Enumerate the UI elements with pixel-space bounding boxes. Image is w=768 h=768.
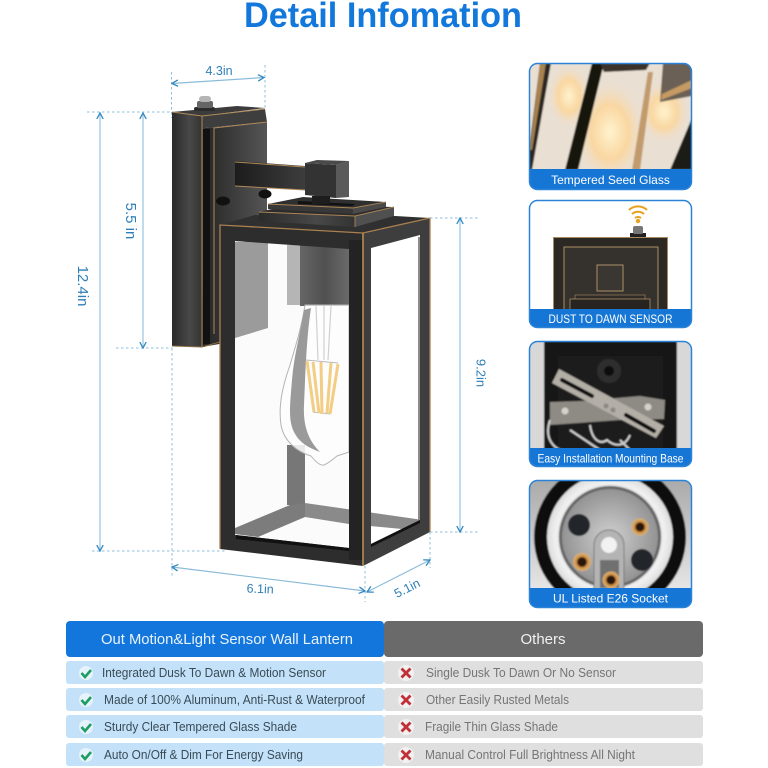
wall lantern product illustration (172, 96, 430, 566)
right column header: Others (520, 631, 566, 648)
caption band: Easy Installation Mounting Base (538, 452, 684, 466)
comparison table (66, 621, 703, 766)
icon: wifi signal (629, 206, 647, 222)
row 3 left: Sturdy Clear Tempered Glass Shade (104, 719, 297, 734)
row 3 right: Fragile Thin Glass Shade (425, 719, 558, 734)
depth arrow 6.1in (172, 567, 365, 596)
panel: dusk to dawn sensor (529, 200, 692, 328)
row 1 left: Integrated Dusk To Dawn & Motion Sensor (102, 665, 327, 680)
caption band: UL Listed E26 Socket (553, 592, 669, 606)
caption band (529, 588, 692, 608)
dotted extension lines (87, 65, 478, 602)
glass background (235, 241, 349, 548)
row 1 right: Single Dusk To Dawn Or No Sensor (426, 665, 617, 680)
dimension lines (74, 64, 488, 602)
row 2 right: Other Easily Rusted Metals (426, 692, 569, 707)
arm height arrow 5.5in: 5.5 in (122, 203, 139, 239)
caption band: DUST TO DAWN SENSOR (548, 312, 673, 326)
panel: tempered seed glass (529, 63, 692, 190)
right column header (384, 621, 703, 657)
row 2 right (384, 688, 703, 711)
caption band (529, 448, 692, 467)
row 2 left (66, 688, 384, 711)
depth arrow 6.1in: 6.1in (246, 582, 274, 596)
width arrow 4.3in (172, 64, 264, 84)
lantern cap (259, 160, 394, 227)
sensor button (630, 226, 646, 237)
lamp socket (300, 245, 349, 306)
lantern interior back frame (235, 245, 423, 537)
row 4 left (66, 743, 384, 766)
left column header (66, 621, 384, 657)
caption band (529, 309, 692, 328)
row 4 right: Manual Control Full Brightness All Night (425, 747, 635, 762)
lantern frame front and side (220, 215, 430, 566)
row 4 right (384, 743, 703, 766)
back plate visible through glass (235, 242, 268, 338)
caption band: Tempered Seed Glass (551, 173, 670, 187)
wall back plate (172, 106, 267, 347)
mounting screws (216, 190, 272, 206)
row 3 left (66, 715, 384, 738)
LED filament bulb (280, 305, 349, 465)
row 1 left (66, 661, 384, 684)
left column header: Out Motion&Light Sensor Wall Lantern (101, 631, 353, 648)
side arrow 5.1in (367, 560, 430, 601)
row 3 right (384, 715, 703, 738)
support arm (235, 161, 305, 190)
lantern height arrow 9.2in: 9.2in (474, 359, 488, 387)
panel: E26 socket (528, 480, 692, 608)
height arrow 12.4in: 12.4in (74, 266, 91, 306)
row 4 left: Auto On/Off & Dim For Energy Saving (104, 747, 303, 762)
caption band (529, 169, 692, 190)
width arrow 4.3in: 4.3in (205, 64, 233, 78)
side arrow 5.1in: 5.1in (392, 576, 422, 601)
row 1 right (384, 661, 703, 684)
dusk sensor on top of plate (194, 96, 215, 111)
panel: mounting base (529, 341, 692, 467)
row 2 left: Made of 100% Aluminum, Anti-Rust & Waterproof (104, 692, 365, 707)
